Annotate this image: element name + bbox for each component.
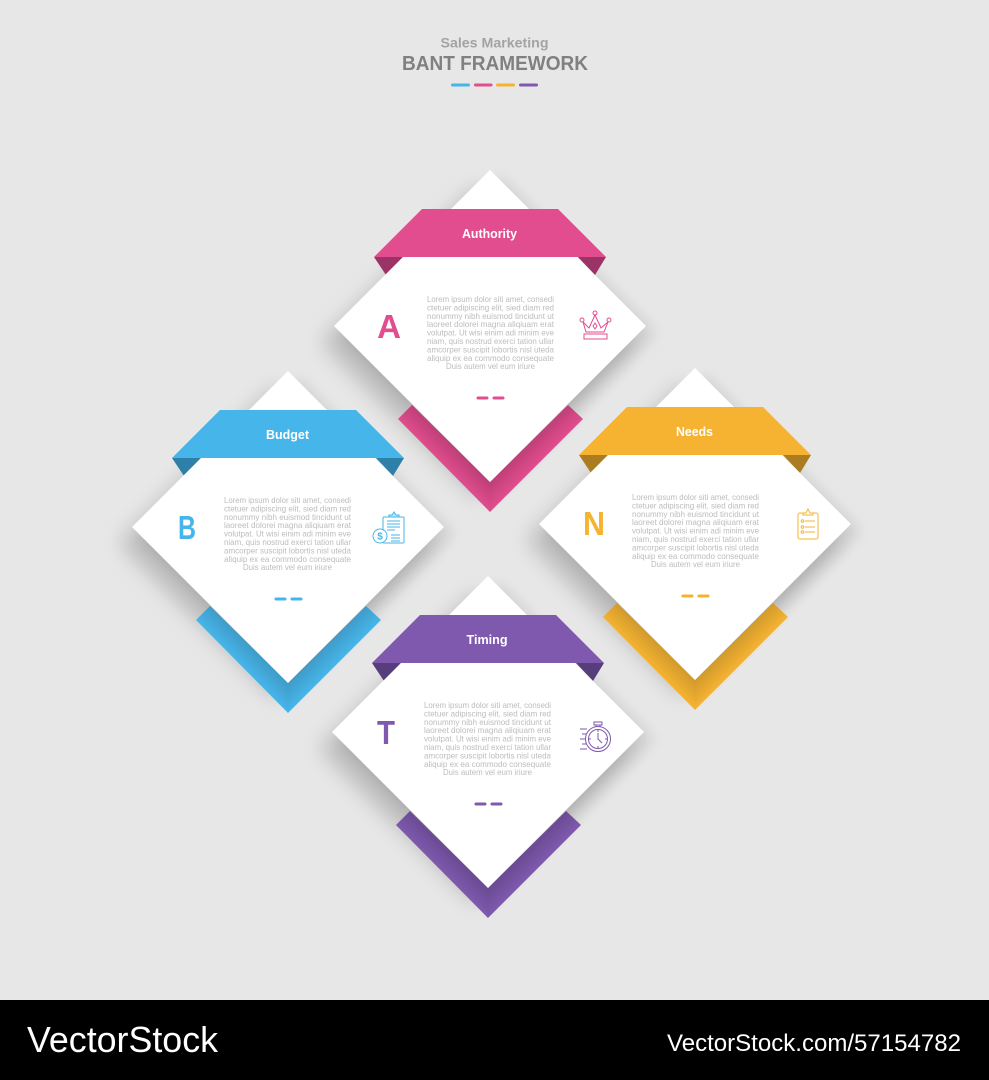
- body text: Lorem ipsum dolor siti amet, consedi: [424, 701, 551, 710]
- bottom chevron band: [396, 811, 581, 918]
- accent dashes: [478, 396, 503, 400]
- ribbon label: Needs: [676, 424, 713, 439]
- panel: needs: [527, 368, 861, 710]
- card shadow: [320, 583, 654, 904]
- letter: B: [178, 509, 196, 546]
- body text: amcorper suscipit lobortis nisl uteda: [427, 345, 554, 354]
- body text: [427, 295, 555, 371]
- body text: niam, quis nostrud exerci tation ullar: [424, 743, 551, 752]
- body text: amcorper suscipit lobortis nisl uteda: [424, 751, 551, 760]
- ribbon folds: [374, 257, 606, 275]
- body text: ctetuer adipiscing elit, sied diam red: [427, 303, 554, 312]
- body text: laoreet dolorei magna aliqiuam erat: [424, 726, 552, 735]
- panel: authority: [322, 170, 656, 512]
- white diamond: [334, 170, 646, 482]
- body text: [424, 701, 552, 777]
- panel: budget: [120, 371, 454, 713]
- body text: ctetuer adipiscing elit, sied diam red: [224, 504, 351, 513]
- ribbon: [172, 410, 404, 458]
- letter: A: [377, 308, 401, 345]
- ribbon: [374, 209, 606, 257]
- body text: aliquip ex ea commodo consequate: [424, 760, 551, 769]
- card shadow: [322, 177, 656, 498]
- accent dashes: [476, 802, 501, 806]
- ribbon label: Timing: [466, 632, 508, 647]
- ribbon: [372, 615, 604, 663]
- icon: budget clipboard and coin: [373, 512, 404, 543]
- bottom chevron band: [603, 603, 788, 710]
- accent dashes: [683, 594, 708, 598]
- ribbon label: Authority: [462, 226, 518, 241]
- body text: aliquip ex ea commodo consequate: [224, 555, 351, 564]
- icon: checklist clipboard: [798, 509, 818, 539]
- body text: aliquip ex ea commodo consequate: [427, 354, 554, 363]
- icon: crown: [580, 311, 611, 339]
- body text: nonummy nibh euismod tincidunt ut: [424, 718, 552, 727]
- body text: volutpat. Ut wisi einim adi minim eve: [632, 527, 759, 536]
- letter: T: [377, 714, 395, 751]
- icon: stopwatch: [580, 722, 610, 752]
- body text: niam, quis nostrud exerci tation ullar: [632, 535, 759, 544]
- body text: nonummy nibh euismod tincidunt ut: [632, 510, 760, 519]
- body text: [224, 496, 352, 572]
- white diamond: [539, 368, 851, 680]
- body text: volutpat. Ut wisi einim adi minim eve: [427, 329, 554, 338]
- card shadow: [120, 378, 454, 699]
- body text: ctetuer adipiscing elit, sied diam red: [632, 501, 759, 510]
- bottom chevron band: [196, 606, 381, 713]
- body text: Lorem ipsum dolor siti amet, consedi: [224, 496, 351, 505]
- body text: laoreet dolorei magna aliqiuam erat: [427, 320, 555, 329]
- footer bar: [0, 1000, 989, 1080]
- body text: [632, 493, 760, 569]
- accent dashes: [276, 598, 301, 600]
- footer logo: VectorStock: [27, 1019, 219, 1060]
- white diamond: [332, 576, 644, 888]
- bottom chevron band: [398, 405, 583, 512]
- letter: N: [583, 505, 605, 542]
- body text: amcorper suscipit lobortis nisl uteda: [224, 546, 351, 555]
- body text: volutpat. Ut wisi einim adi minim eve: [424, 735, 551, 744]
- body text: volutpat. Ut wisi einim adi minim eve: [224, 530, 351, 539]
- footer url: VectorStock.com/57154782: [667, 1030, 961, 1057]
- ribbon folds: [579, 455, 811, 473]
- body text: nonummy nibh euismod tincidunt ut: [224, 513, 352, 522]
- card shadow: [527, 375, 861, 696]
- ribbon label: Budget: [266, 427, 310, 442]
- white diamond: [132, 371, 444, 683]
- ribbon folds: [172, 458, 404, 476]
- ribbon folds: [372, 663, 604, 681]
- body text: Duis autem vel eum iriure: [651, 560, 740, 569]
- body text: Duis autem vel eum iriure: [443, 768, 532, 777]
- body text: niam, quis nostrud exerci tation ullar: [224, 538, 351, 547]
- body text: amcorper suscipit lobortis nisl uteda: [632, 543, 759, 552]
- body text: niam, quis nostrud exerci tation ullar: [427, 337, 554, 346]
- body text: laoreet dolorei magna aliqiuam erat: [632, 518, 760, 527]
- panel: timing: [320, 576, 654, 918]
- ribbon: [579, 407, 811, 455]
- main title: BANT FRAMEWORK: [402, 53, 589, 75]
- title block: [402, 34, 589, 85]
- body text: ctetuer adipiscing elit, sied diam red: [424, 709, 551, 718]
- body text: laoreet dolorei magna aliqiuam erat: [224, 521, 352, 530]
- subtitle: Sales Marketing: [440, 34, 548, 50]
- body text: aliquip ex ea commodo consequate: [632, 552, 759, 561]
- body text: Duis autem vel eum iriure: [243, 563, 332, 572]
- colour bars: [452, 84, 536, 86]
- body text: Lorem ipsum dolor siti amet, consedi: [427, 295, 554, 304]
- body text: Lorem ipsum dolor siti amet, consedi: [632, 493, 759, 502]
- icon: budget clipboard and coin: $: [377, 532, 383, 542]
- body text: Duis autem vel eum iriure: [446, 362, 535, 371]
- body text: nonummy nibh euismod tincidunt ut: [427, 312, 555, 321]
